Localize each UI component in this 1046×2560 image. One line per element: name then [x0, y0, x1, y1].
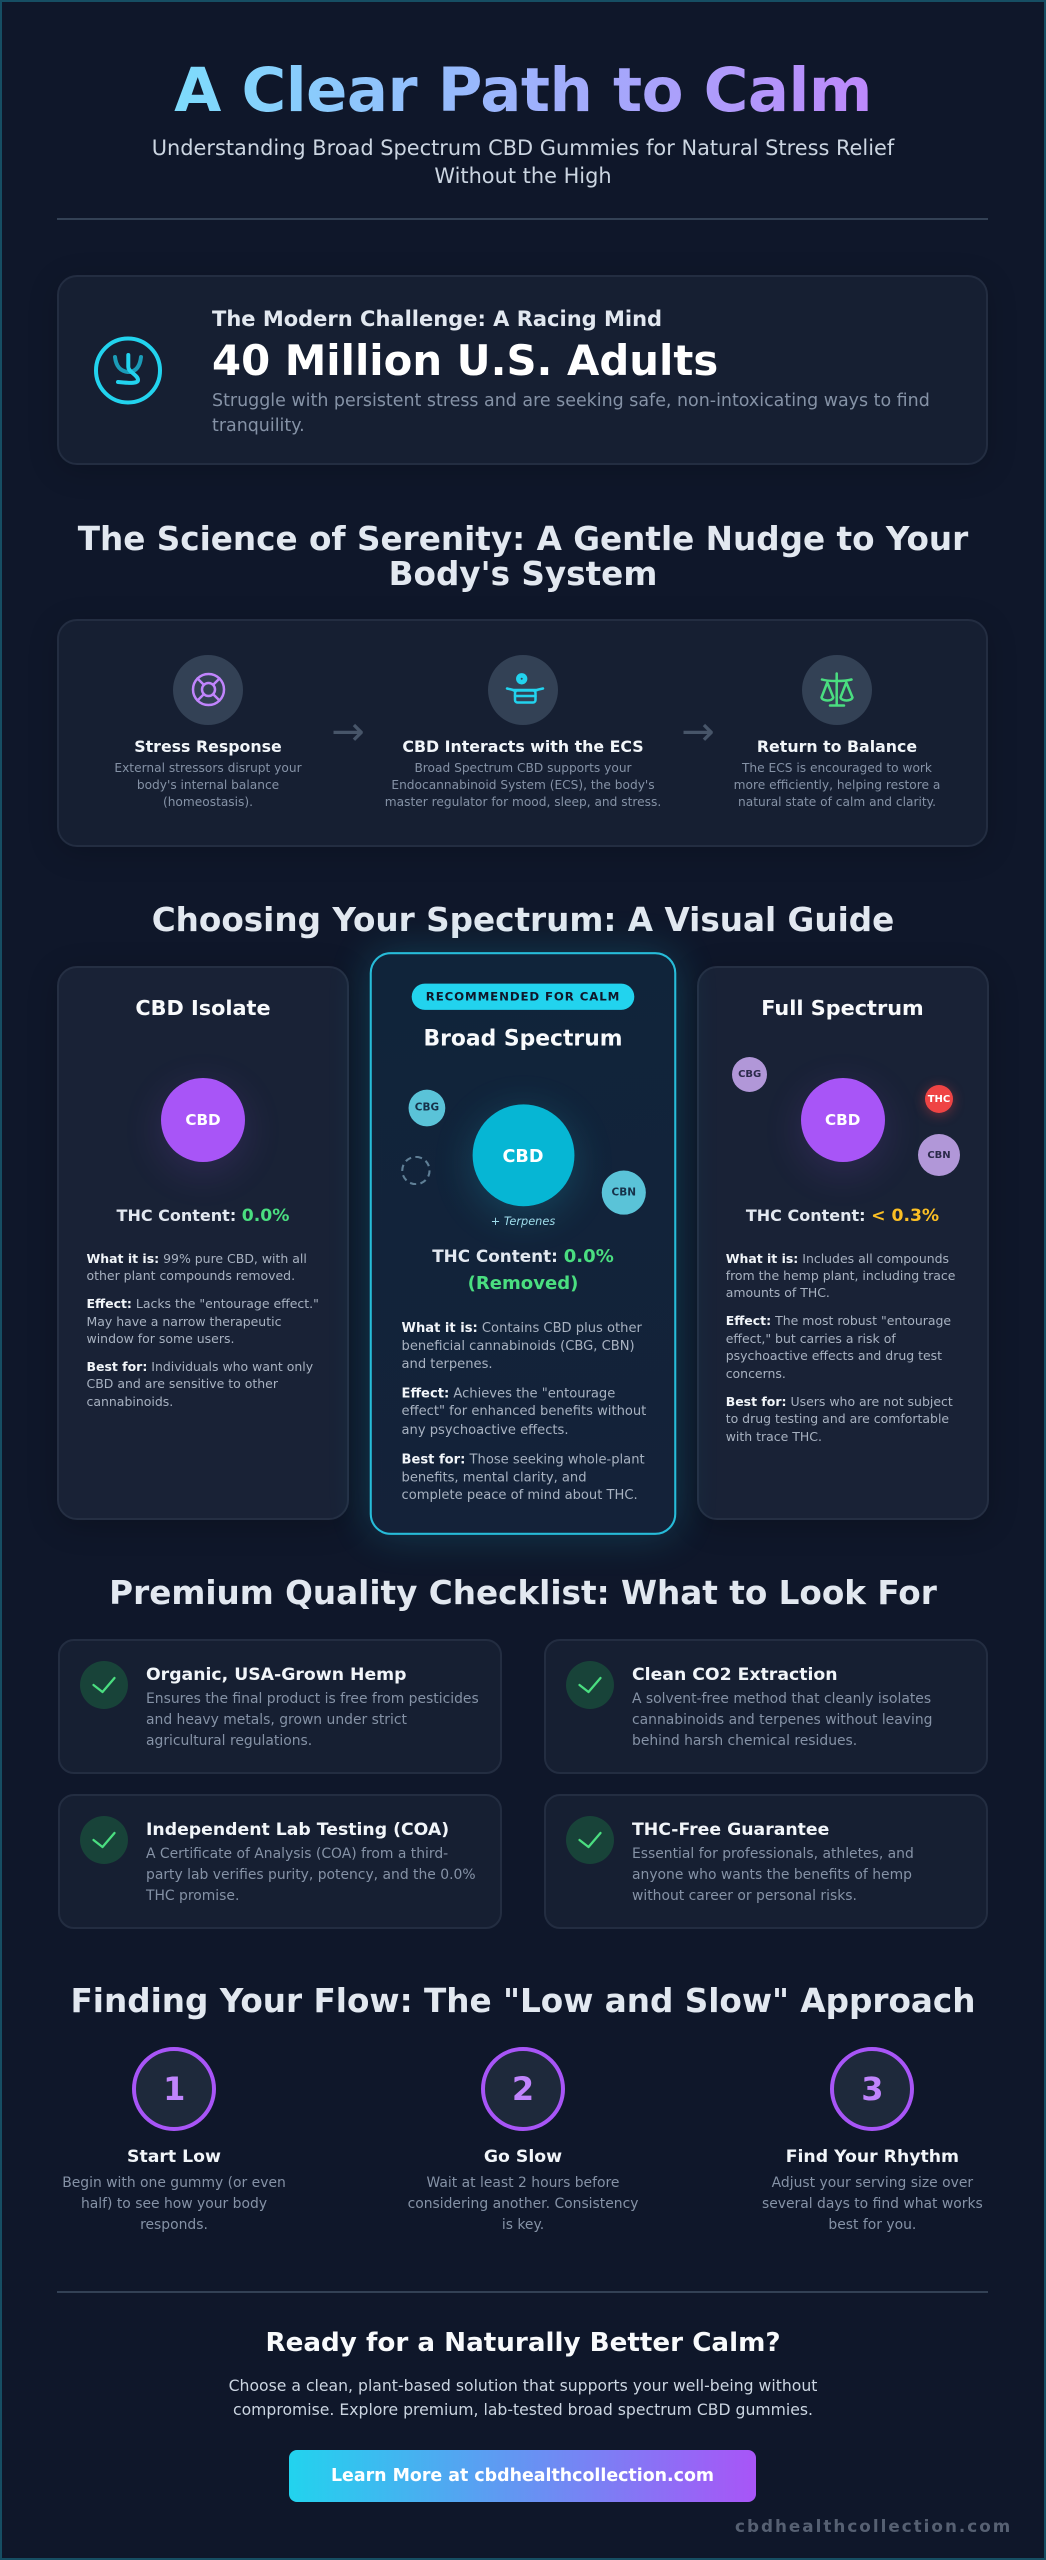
checklist item: organic hemp: [58, 1639, 502, 1774]
step 3 text: [762, 2174, 983, 2232]
item text: Ensures the final product is free from pesticides: [146, 1691, 479, 1707]
call to action text: Choose a clean, plant-based solution that supports your well-being without: [229, 2376, 817, 2394]
item title: Independent Lab Testing (COA): [146, 1820, 449, 1840]
step 1 text: [62, 2174, 286, 2232]
badge: RECOMMENDED FOR CALM: [426, 989, 620, 1003]
effect: [402, 1384, 646, 1437]
molecule: thc: [925, 1085, 953, 1113]
step 3 title: Find Your Rhythm: [786, 2147, 959, 2167]
terpenes note: + Terpenes: [491, 1214, 555, 1227]
watermark: cbdhealthcollection.com: [735, 2516, 1012, 2536]
heading: science of serenity: [78, 520, 968, 592]
molecule: cbg: [732, 1057, 767, 1092]
effect: any psychoactive effects.: [402, 1421, 569, 1436]
what it is: What it is: Contains CBD plus other: [402, 1319, 642, 1334]
button: [289, 2450, 756, 2502]
step 1 title: Start Low: [127, 2147, 221, 2167]
call to action text: compromise. Explore premium, lab-tested broad spectrum CBD gummies.: [233, 2400, 813, 2419]
statistic: 40 Million U.S. Adults: [212, 336, 718, 385]
molecule: cbg: CBG: [415, 1102, 439, 1113]
heading: finding your flow: Finding Your Flow: The "Low and Slow" Approach: [70, 1982, 976, 2020]
icon: check: [80, 1661, 128, 1709]
best for: complete peace of mind about THC.: [402, 1487, 638, 1502]
heading: science of serenity: Body's System: [389, 554, 657, 592]
item text: without career or personal risks.: [632, 1888, 857, 1904]
removed thc marker: [401, 1155, 431, 1185]
icon: ecs interaction: [488, 654, 558, 724]
challenge description: tranquility.: [212, 416, 305, 436]
molecule: cbn: [602, 1170, 646, 1214]
step 3 text: several days to find what works: [762, 2196, 983, 2212]
effect: effect," but carries a risk of: [726, 1331, 896, 1346]
step: stress response text: External stressors disrupt your: [114, 760, 302, 774]
panel: process flow: [57, 619, 988, 847]
molecule: cbd: CBD: [502, 1144, 543, 1165]
subtitle: Without the High: [434, 164, 612, 188]
best for: Best for: Users who are not subject: [726, 1394, 953, 1409]
thc content: THC Content: 0.0%: [117, 1206, 289, 1226]
icon: check: [566, 1661, 614, 1709]
step 1 number: 1: [163, 2070, 185, 2108]
panel: broad spectrum (recommended): [370, 952, 676, 1534]
step: return to balance text: more efficiently, helping restore a: [734, 778, 940, 792]
effect: [86, 1296, 319, 1346]
panel: cbd isolate: [57, 966, 349, 1520]
step 3 number: 3: [861, 2070, 884, 2108]
checklist item: co2 extraction: [544, 1639, 988, 1774]
step 3 text: Adjust your serving size over: [772, 2174, 973, 2190]
item text: party lab verifies purity, potency, and the 0.0%: [146, 1867, 476, 1883]
step: stress response text: [114, 760, 302, 809]
call to action heading: Ready for a Naturally Better Calm?: [265, 2328, 781, 2358]
item title: Organic, USA-Grown Hemp: [146, 1665, 407, 1685]
badge: [412, 983, 634, 1009]
item text: cannabinoids and terpenes without leaving: [632, 1712, 932, 1728]
card title: CBD Isolate: [135, 996, 271, 1020]
effect: [726, 1313, 951, 1381]
challenge heading: The Modern Challenge: A Racing Mind: [212, 307, 662, 331]
molecule: cbg: CBG: [738, 1069, 761, 1080]
what it is: [402, 1319, 642, 1371]
challenge description: [212, 391, 930, 436]
item text: agricultural regulations.: [146, 1733, 312, 1749]
item text: A solvent-free method that cleanly isolates: [632, 1691, 931, 1707]
step 2 text: [408, 2174, 638, 2232]
step 2 text: is key.: [502, 2216, 544, 2232]
molecule: cbd: [801, 1078, 885, 1162]
checklist item: lab testing: [58, 1794, 502, 1929]
step: return to balance text: [734, 760, 940, 809]
effect: effect" for enhanced benefits without: [402, 1402, 646, 1418]
icon: life buoy: [173, 654, 243, 724]
what it is: [726, 1250, 955, 1300]
what it is: [86, 1250, 307, 1283]
step: stress response text: body's internal balance: [137, 778, 279, 792]
what it is: other plant compounds removed.: [86, 1268, 295, 1283]
what it is: and terpenes.: [402, 1355, 493, 1371]
item text: Essential for professionals, athletes, and: [632, 1846, 914, 1862]
best for: CBD and are sensitive to other: [86, 1376, 278, 1391]
item text: [632, 1846, 914, 1904]
step: cbd interacts text: [385, 760, 661, 809]
heading: science of serenity: The Science of Serenity: A Gentle Nudge to Your: [78, 520, 968, 558]
molecule: cbn: [918, 1134, 960, 1176]
molecule: cbd: CBD: [185, 1111, 221, 1129]
item text: A Certificate of Analysis (COA) from a third-: [146, 1846, 448, 1862]
step 2 number: 2: [512, 2070, 534, 2108]
subtitle: Understanding Broad Spectrum CBD Gummies for Natural Stress Relief: [152, 136, 894, 160]
card title: Broad Spectrum: [423, 1025, 623, 1050]
molecule: cbn: CBN: [927, 1150, 951, 1160]
step 1 text: Begin with one gummy (or even: [62, 2174, 286, 2190]
best for: benefits, mental clarity, and: [402, 1468, 587, 1484]
what it is: beneficial cannabinoids (CBG, CBN): [402, 1337, 635, 1353]
best for: with trace THC.: [726, 1429, 822, 1444]
what it is: What it is: 99% pure CBD, with all: [86, 1250, 307, 1266]
card title: Full Spectrum: [761, 996, 924, 1020]
icon: check: [80, 1816, 128, 1864]
title: A Clear Path to Calm: [174, 54, 872, 126]
item title: Clean CO2 Extraction: [632, 1665, 838, 1685]
checklist item: thc-free: [544, 1794, 988, 1929]
step: return to balance title: Return to Balance: [757, 737, 917, 756]
best for: [86, 1359, 313, 1409]
molecule: thc: THC: [928, 1094, 950, 1104]
molecule: cbn: CBN: [612, 1186, 636, 1198]
effect: concerns.: [726, 1366, 786, 1381]
molecule: cbg: [409, 1089, 445, 1126]
effect: window for some users.: [86, 1331, 234, 1346]
step: cbd interacts text: Endocannabinoid System (ECS), the body's: [391, 778, 655, 792]
step 1 text: half) to see how your body: [81, 2196, 267, 2212]
best for: Best for: Individuals who want only: [86, 1359, 313, 1374]
step: return to balance text: natural state of calm and clarity.: [738, 795, 936, 809]
step: cbd interacts text: Broad Spectrum CBD supports your: [414, 760, 632, 774]
step 1 text: responds.: [140, 2216, 208, 2232]
step: stress response title: Stress Response: [134, 737, 282, 756]
item text: behind harsh chemical residues.: [632, 1733, 857, 1749]
what it is: What it is: Includes all compounds: [726, 1250, 949, 1266]
step: cbd interacts title: CBD Interacts with the ECS: [402, 737, 644, 756]
step 2 text: considering another. Consistency: [408, 2196, 638, 2212]
challenge description: Struggle with persistent stress and are seeking safe, non-intoxicating ways to find: [212, 391, 930, 411]
subtitle: [152, 136, 895, 188]
molecule: cbd: CBD: [825, 1111, 860, 1129]
item text: THC promise.: [146, 1888, 239, 1904]
item text: [146, 1691, 479, 1749]
effect: Effect: The most robust "entourage: [726, 1313, 951, 1328]
heading: premium checklist: Premium Quality Checklist: What to Look For: [109, 1574, 937, 1612]
button: Learn More at cbdhealthcollection.com: [331, 2466, 714, 2486]
arrow: →: [681, 709, 715, 755]
thc content: THC Content: 0.0%: [432, 1246, 614, 1267]
icon: racing mind: [94, 336, 162, 404]
item text: anyone who wants the benefits of hemp: [632, 1867, 912, 1883]
thc content: THC Content: < 0.3%: [746, 1206, 939, 1226]
panel: full spectrum: [696, 966, 988, 1520]
step 1 number: [132, 2047, 216, 2131]
effect: Effect: Lacks the "entourage effect.": [86, 1296, 319, 1311]
icon: balance scale: [802, 654, 872, 724]
item text: [146, 1846, 476, 1904]
best for: [402, 1450, 645, 1502]
what it is: from the hemp plant, including trace: [726, 1268, 955, 1283]
step 3 number: [830, 2047, 914, 2131]
thc content: [432, 1246, 614, 1294]
step: return to balance text: The ECS is encouraged to work: [742, 760, 932, 774]
molecule: cbd: [161, 1078, 245, 1162]
best for: Best for: Those seeking whole-plant: [402, 1450, 645, 1466]
panel: modern challenge: [57, 275, 988, 465]
item text: and heavy metals, grown under strict: [146, 1712, 407, 1728]
effect: psychoactive effects and drug test: [726, 1348, 942, 1363]
step 2 number: [481, 2047, 565, 2131]
item title: THC-Free Guarantee: [632, 1820, 829, 1840]
step: stress response text: (homeostasis).: [163, 795, 253, 809]
what it is: amounts of THC.: [726, 1285, 830, 1300]
molecule: cbd: [472, 1104, 574, 1206]
thc content: (Removed): [468, 1273, 578, 1294]
step 2 text: Wait at least 2 hours before: [427, 2174, 619, 2190]
arrow: →: [331, 709, 365, 755]
best for: to drug testing and are comfortable: [726, 1411, 949, 1426]
call to action text: [229, 2376, 817, 2419]
best for: [726, 1394, 953, 1444]
heading: choosing your spectrum: Choosing Your Spectrum: A Visual Guide: [152, 900, 894, 938]
item text: [632, 1691, 932, 1749]
best for: cannabinoids.: [86, 1394, 173, 1409]
step: cbd interacts text: master regulator for mood, sleep, and stress.: [385, 795, 661, 809]
effect: May have a narrow therapeutic: [86, 1314, 281, 1329]
step 3 text: best for you.: [828, 2216, 916, 2232]
effect: Effect: Achieves the "entourage: [402, 1384, 615, 1400]
icon: check: [566, 1816, 614, 1864]
step 2 title: Go Slow: [484, 2147, 562, 2167]
